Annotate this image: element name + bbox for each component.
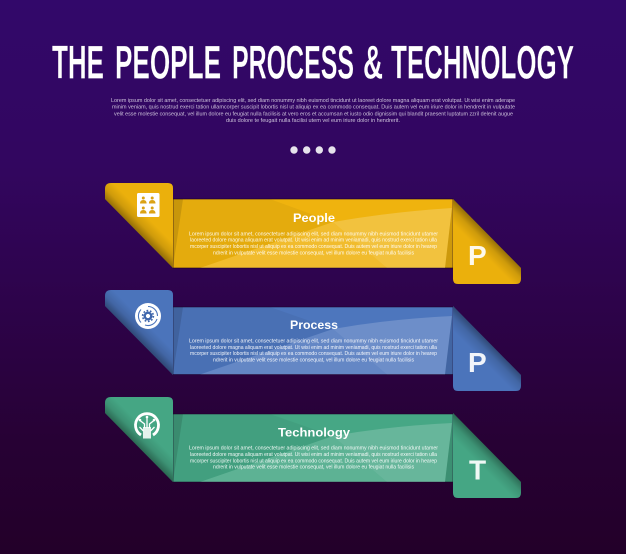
right fold tab: technology	[453, 413, 521, 498]
icon: gear	[135, 303, 161, 329]
heading: technology: Technology	[278, 426, 350, 440]
title: THE	[52, 36, 104, 88]
left fold tab: technology	[105, 397, 173, 482]
body text: process: laoreeted dolore magna aliquam erat volutpat. Ut wisi enim ad minim veniamadi, quis nostrud exerci tation ulla	[190, 345, 437, 351]
intro paragraph	[111, 98, 515, 124]
letter: P: P	[468, 347, 487, 378]
band shading: people	[173, 199, 453, 268]
right fold tab: process	[453, 306, 521, 391]
body text: process: mcorper suscipiter lobortis nisl ut aliquip ex ea commodo consequat. Duis autem vel eum iriure dolor in hearep	[190, 351, 437, 357]
intro paragraph: duis dolore te feugait nulla facilisi utem vel eum iriure dolor in hendrerit.	[226, 118, 400, 124]
body text: people	[189, 231, 438, 256]
icon: circuit tree	[136, 414, 158, 438]
body text: technology: mcorper suscipiter lobortis nisl ut aliquip ex ea commodo consequat. Duis autem vel eum iriure dolor in hearep	[190, 458, 437, 464]
heading: process: Process	[290, 318, 338, 332]
body text: technology: laoreeted dolore magna aliquam erat volutpat. Ut wisi enim ad minim veniamadi, quis nostrud exerci tation ulla	[190, 452, 437, 458]
pagination dots	[290, 146, 336, 154]
body text: people: ndrerit in vulputate velit esse molestie consequat, vel illum dolore eu feugiat nulla facilisis	[213, 250, 414, 256]
body text: people: Lorem ipsum dolor sit amet, consectetuer adipiscing elit, sed diam nonummy nibh euismod tincidunt utamer	[189, 231, 438, 237]
body text: process: Lorem ipsum dolor sit amet, consectetuer adipiscing elit, sed diam nonummy nibh euismod tincidunt utamer	[189, 338, 438, 344]
intro paragraph: minim veniam, quis nostrud exerci tation ullamcorper suscipit lobortis nisl ut aliquip ex ea commodo consequat. Duis autem vel eum iriure dolor in hendrerit in vulputate	[112, 105, 515, 111]
title: PEOPLE	[115, 36, 221, 88]
body text: technology	[189, 446, 438, 471]
body text: process	[189, 338, 438, 363]
left fold tab: people	[105, 183, 173, 268]
band shading: process	[173, 307, 453, 374]
title	[52, 36, 574, 88]
body text: technology: ndrerit in vulputate velit esse molestie consequat, vel illum dolore eu feugiat nulla facilisis	[213, 465, 414, 471]
band: people	[173, 199, 453, 268]
left fold tab: process	[105, 290, 173, 375]
band: process	[173, 307, 453, 374]
body text: technology: Lorem ipsum dolor sit amet, consectetuer adipiscing elit, sed diam nonummy nibh euismod tincidunt utamer	[189, 446, 438, 452]
title: PROCESS	[232, 36, 354, 88]
band: technology	[173, 414, 453, 482]
icon: people grid	[137, 193, 160, 217]
right fold tab: people	[453, 199, 521, 284]
intro paragraph: Lorem ipsum dolor sit amet, consectetuer adipiscing elit, sed diam nonummy nibh euismod tincidunt ut laoreet dolore magna aliquam erat volutpat. Ut wisi enim aderape	[111, 98, 515, 104]
body text: people: laoreeted dolore magna aliquam erat volutpat. Ut wisi enim ad minim veniamadi, quis nostrud exerci tation ulla	[190, 238, 437, 244]
title: &	[363, 36, 383, 88]
panel: technology	[105, 397, 521, 498]
letter: T: T	[469, 454, 486, 486]
panel: people	[105, 183, 521, 284]
body text: people: mcorper suscipiter lobortis nisl ut aliquip ex ea commodo consequat. Duis autem vel eum iriure dolor in hearep	[190, 244, 437, 250]
intro paragraph: velit esse molestie consequat, vel illum dolore eu feugiat nulla facilisis at vero eros et accumsan et iusto odio dignissim qui blandit praesent luptatum zzril delenit augue	[114, 111, 513, 117]
heading: people: People	[293, 211, 335, 225]
band shading: technology	[173, 414, 453, 482]
body text: process: ndrerit in vulputate velit esse molestie consequat, vel illum dolore eu feugiat nulla facilisis	[213, 357, 414, 363]
letter: P: P	[468, 240, 487, 271]
panel: process	[105, 290, 521, 391]
